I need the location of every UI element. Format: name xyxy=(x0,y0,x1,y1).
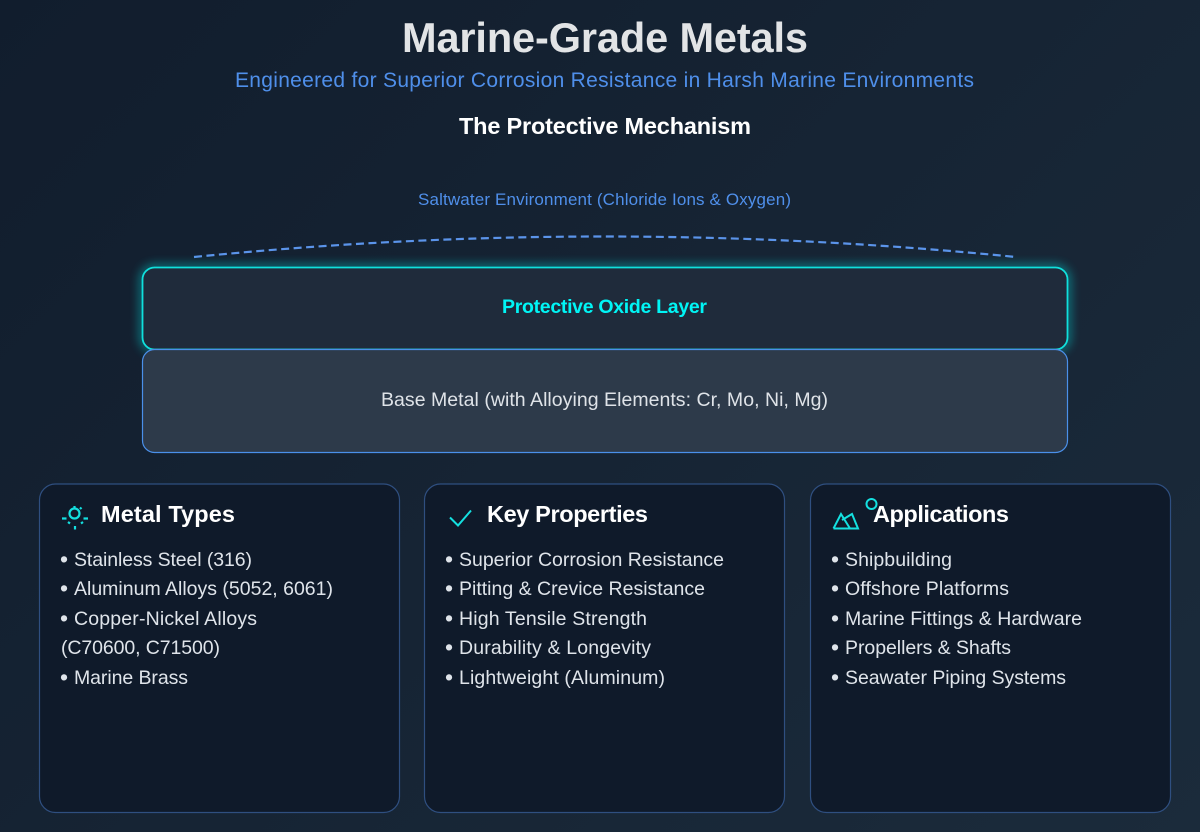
list: • xyxy=(831,634,839,660)
base metal xyxy=(142,350,1068,452)
list: Marine Brass xyxy=(74,667,188,689)
heading: Key Properties xyxy=(487,501,648,527)
saltwater label: Saltwater Environment (Chloride Ions & Oxygen) xyxy=(418,190,791,209)
dashed arc: saltwater boundary xyxy=(194,236,1016,257)
list: High Tensile Strength xyxy=(459,608,647,630)
list: • xyxy=(60,605,68,631)
icon: check mark xyxy=(450,510,471,526)
section heading: The Protective Mechanism xyxy=(459,113,751,139)
heading: Metal Types xyxy=(101,501,235,527)
list: • xyxy=(445,575,453,601)
list: Stainless Steel (316) xyxy=(74,549,252,571)
list: Propellers & Shafts xyxy=(845,637,1011,659)
list xyxy=(60,546,333,690)
list: • xyxy=(60,575,68,601)
list: • xyxy=(831,605,839,631)
base metal: Base Metal (with Alloying Elements: Cr, Mo, Ni, Mg) xyxy=(381,389,828,411)
panel: key properties xyxy=(424,484,784,812)
list: Seawater Piping Systems xyxy=(845,667,1066,689)
icon: sun xyxy=(62,506,88,530)
list: Aluminum Alloys (5052, 6061) xyxy=(74,578,333,600)
panel: metal types xyxy=(40,484,400,812)
list: Pitting & Crevice Resistance xyxy=(459,578,705,600)
heading: Applications xyxy=(873,501,1009,527)
list: • xyxy=(60,664,68,690)
subtitle: Engineered for Superior Corrosion Resistance in Harsh Marine Environments xyxy=(235,69,974,92)
list: • xyxy=(831,575,839,601)
list: • xyxy=(445,664,453,690)
list: Marine Fittings & Hardware xyxy=(845,608,1082,630)
list: • xyxy=(60,546,68,572)
protective layer diagram xyxy=(142,268,1068,452)
list: Copper-Nickel Alloys xyxy=(74,608,257,630)
oxide layer xyxy=(142,268,1068,350)
list: • xyxy=(831,546,839,572)
list: • xyxy=(445,605,453,631)
list: (C70600, C71500) xyxy=(61,637,220,659)
panel: applications xyxy=(810,484,1170,812)
list xyxy=(831,546,1082,690)
list: • xyxy=(831,664,839,690)
oxide layer: Protective Oxide Layer xyxy=(502,296,707,318)
list: Durability & Longevity xyxy=(459,637,651,659)
list: • xyxy=(445,546,453,572)
list: Lightweight (Aluminum) xyxy=(459,667,665,689)
list: Superior Corrosion Resistance xyxy=(459,549,724,571)
icon: mountains xyxy=(834,499,876,528)
list: • xyxy=(445,634,453,660)
list: Offshore Platforms xyxy=(845,578,1009,600)
title: Marine-Grade Metals xyxy=(402,14,808,61)
list xyxy=(445,546,724,690)
list: Shipbuilding xyxy=(845,549,952,571)
